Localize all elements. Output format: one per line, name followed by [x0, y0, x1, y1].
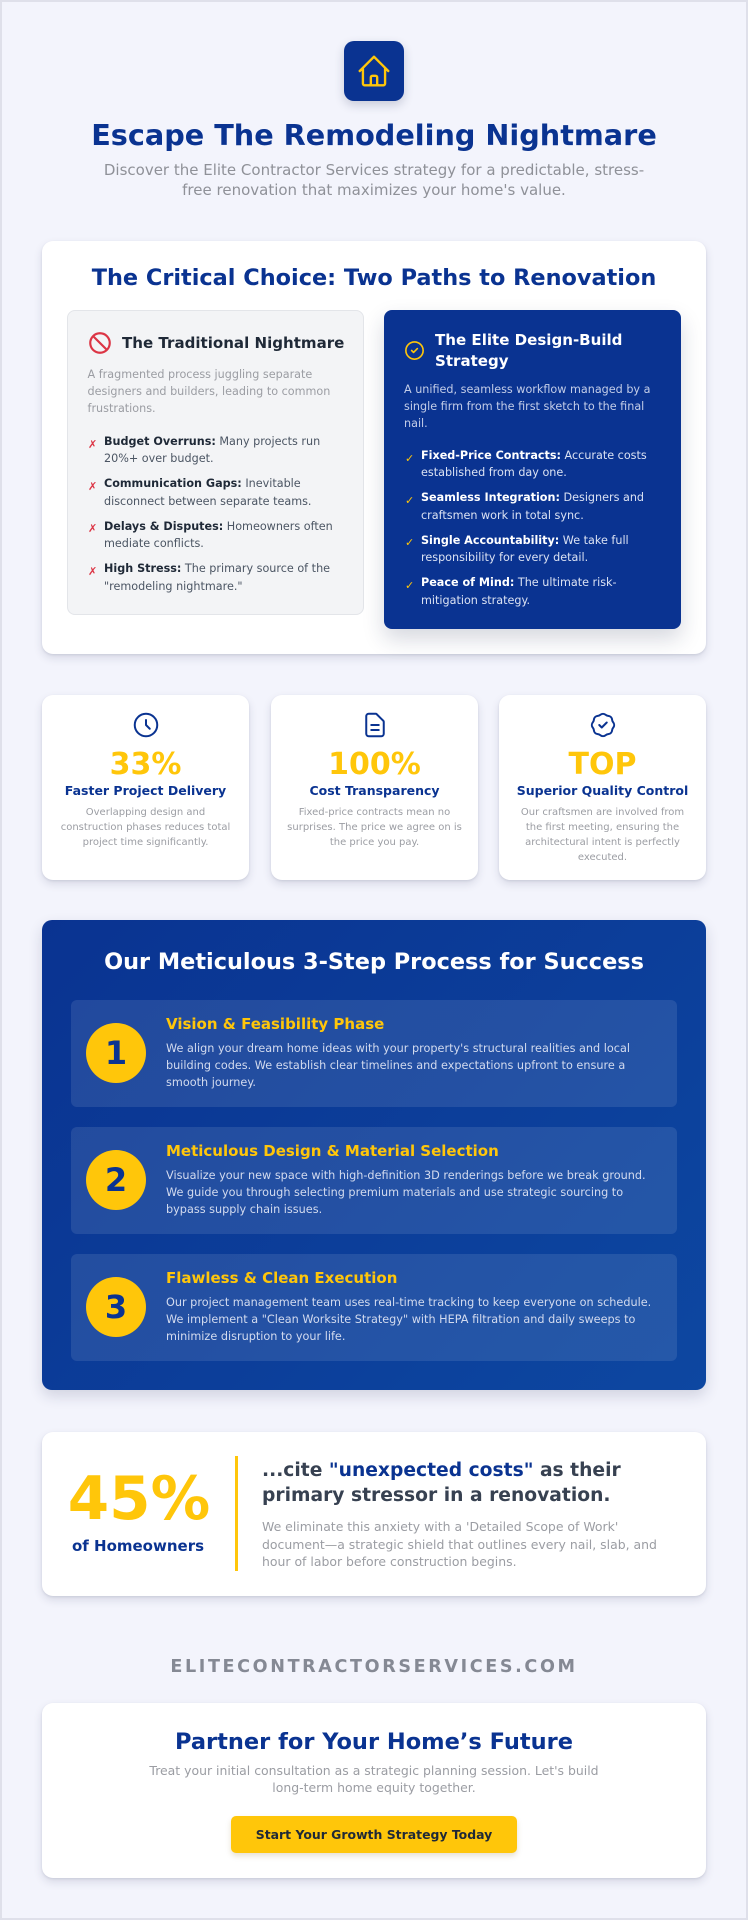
- cta description: long-term home equity together.: [272, 1780, 476, 1795]
- panel: stat cost transparency: [271, 695, 478, 880]
- step description: Our project management team uses real-time tracking to keep everyone on schedule.: [166, 1296, 651, 1308]
- text: traditional description: designers and builders, leading to common: [88, 385, 330, 398]
- callout description: hour of labor before construction begins.: [262, 1554, 517, 1569]
- list: elite benefits: craftsmen work in total sync.: [421, 509, 584, 522]
- step description: smooth journey.: [166, 1076, 256, 1089]
- heading: elite strategy: The Elite Design-Build: [435, 331, 622, 349]
- stat description: the first meeting, ensuring the: [526, 822, 679, 832]
- panel: critical choice: [42, 241, 706, 654]
- icon: house logo: [344, 41, 404, 101]
- list: traditional problems: mediate conflicts.: [104, 537, 204, 550]
- stat description: [521, 806, 684, 862]
- list: elite benefits: ✓: [405, 452, 414, 465]
- cta heading: Partner for Your Home’s Future: [175, 1729, 573, 1755]
- heading: elite strategy: Strategy: [435, 352, 509, 370]
- text: elite description: nail.: [404, 417, 428, 430]
- step title: Vision & Feasibility Phase: [166, 1015, 384, 1033]
- list: traditional problems: 20%+ over budget.: [104, 452, 214, 465]
- list: elite benefits: Peace of Mind: The ultimate risk-: [421, 576, 617, 589]
- text: elite description: [404, 382, 650, 430]
- list: elite benefits: ✓: [405, 579, 414, 592]
- stat description: surprises. The price we agree on is: [287, 822, 462, 832]
- callout description: [262, 1519, 657, 1569]
- step description: Visualize your new space with high-definition 3D renderings before we break ground.: [166, 1168, 646, 1182]
- step description: building codes. We establish clear timelines and expectations upfront to ensure a: [166, 1059, 625, 1072]
- number badge 1: [86, 1023, 146, 1083]
- step description: We implement a "Clean Worksite Strategy" with HEPA filtration and daily sweeps to: [166, 1313, 635, 1326]
- list: traditional problems: Delays & Disputes: Homeowners often: [104, 520, 333, 533]
- number badge 3: [86, 1277, 146, 1337]
- cta button: [231, 1816, 517, 1853]
- list: elite benefits: ✓: [405, 494, 414, 507]
- text: elite description: single firm from the first sketch to the final: [404, 400, 644, 413]
- number badge 2: [86, 1150, 146, 1210]
- heading: traditional nightmare: The Traditional Nightmare: [122, 334, 344, 352]
- panel: traditional nightmare: [67, 310, 364, 615]
- step description: bypass supply chain issues.: [166, 1203, 322, 1216]
- title: Escape The Remodeling Nightmare: [91, 118, 657, 152]
- list: elite benefits: mitigation strategy.: [421, 594, 530, 607]
- stat description: construction phases reduces total: [61, 822, 230, 832]
- callout heading: [262, 1460, 621, 1506]
- list: traditional problems: "remodeling nightmare.": [104, 580, 243, 593]
- panel: 3-step process: [42, 920, 706, 1390]
- stat description: project time significantly.: [83, 836, 208, 848]
- stat label: Superior Quality Control: [517, 783, 688, 798]
- icon: ban: [89, 332, 111, 354]
- text: elite description: A unified, seamless workflow managed by a: [404, 382, 650, 396]
- icon: badge check: [590, 712, 616, 738]
- list: traditional problems: ✗: [88, 565, 97, 578]
- cta description: Treat your initial consultation as a strategic planning session. Let's build: [149, 1762, 599, 1778]
- text: traditional description: [88, 368, 330, 415]
- list: traditional problems: High Stress: The primary source of the: [104, 562, 330, 575]
- website url: ELITECONTRACTORSERVICES.COM: [170, 1657, 578, 1677]
- list: traditional problems: Budget Overruns: Many projects run: [104, 435, 320, 448]
- step description: We guide you through selecting premium materials and use strategic sourcing to: [166, 1186, 623, 1199]
- stat description: architectural intent is perfectly: [525, 836, 680, 848]
- stat description: Our craftsmen are involved from: [521, 806, 684, 818]
- stat description: executed.: [578, 852, 627, 862]
- subtitle: Discover the Elite Contractor Services strategy for a predictable, stress-: [104, 161, 644, 179]
- panel: call to action: [42, 1703, 706, 1878]
- step description: We align your dream home ideas with your property's structural realities and local: [166, 1042, 630, 1054]
- icon: clock: [134, 712, 158, 738]
- step title: Flawless & Clean Execution: [166, 1269, 397, 1287]
- step 1: [71, 1000, 677, 1107]
- stat number: TOP: TOP: [569, 747, 636, 782]
- heading: process: Our Meticulous 3-Step Process for Success: [104, 949, 644, 975]
- heading: elite strategy: [435, 331, 622, 370]
- list: traditional problems: ✗: [88, 480, 97, 493]
- panel: 45% statistic: [42, 1432, 706, 1596]
- list: elite benefits: responsibility for every detail.: [421, 551, 588, 564]
- step description: [166, 1168, 646, 1216]
- callout heading: ...cite "unexpected costs" as their: [262, 1460, 621, 1481]
- list: traditional problems: ✗: [88, 438, 97, 451]
- icon: check circle: [405, 341, 424, 360]
- subtitle: free renovation that maximizes your home's value.: [182, 181, 566, 199]
- list: traditional problems: Communication Gaps: Inevitable: [104, 477, 301, 490]
- stat label: Faster Project Delivery: [65, 783, 226, 798]
- list: traditional problems: disconnect between separate teams.: [104, 495, 311, 508]
- list: elite benefits: ✓: [405, 536, 414, 549]
- heading: critical choice: The Critical Choice: Two Paths to Renovation: [92, 265, 656, 291]
- stat number: 100%: 100%: [328, 747, 421, 782]
- panel: stat quality control: [499, 695, 706, 880]
- stat label: of Homeowners: [72, 1537, 204, 1555]
- stat description: Overlapping design and: [86, 806, 205, 818]
- list: elite benefits: Fixed-Price Contracts: Accurate costs: [421, 449, 647, 462]
- list: elite benefits: Seamless Integration: Designers and: [421, 491, 644, 504]
- stat description: [61, 806, 230, 848]
- stat description: Fixed-price contracts mean no: [299, 806, 450, 818]
- stat number: 33%: 33%: [110, 747, 181, 782]
- stat description: [287, 806, 462, 848]
- list: traditional problems: ✗: [88, 522, 97, 535]
- list: traditional problems: [88, 435, 333, 593]
- callout description: document—a strategic shield that outlines every nail, slab, and: [262, 1536, 657, 1552]
- stat label: Cost Transparency: [309, 783, 440, 798]
- icon: document: [365, 712, 385, 738]
- step description: minimize disruption to your life.: [166, 1330, 345, 1343]
- stat number: 45%: 45%: [68, 1465, 210, 1534]
- list: elite benefits: [405, 449, 647, 607]
- callout heading: primary stressor in a renovation.: [262, 1485, 610, 1506]
- step description: [166, 1296, 651, 1343]
- number badge 1: 1: [105, 1034, 127, 1072]
- panel: stat faster delivery: [42, 695, 249, 880]
- cta button: Start Your Growth Strategy Today: [256, 1827, 492, 1842]
- divider: [235, 1456, 238, 1571]
- number badge 3: 3: [105, 1288, 127, 1326]
- callout description: We eliminate this anxiety with a 'Detailed Scope of Work': [262, 1519, 618, 1534]
- step description: [166, 1042, 630, 1089]
- step title: Meticulous Design & Material Selection: [166, 1142, 499, 1160]
- number badge 2: 2: [105, 1161, 127, 1199]
- text: traditional description: frustrations.: [88, 402, 156, 415]
- list: elite benefits: established from day one.: [421, 466, 567, 479]
- stat description: the price you pay.: [330, 836, 419, 848]
- panel: elite design-build: [384, 310, 681, 629]
- step 2: [71, 1127, 677, 1234]
- subtitle: [104, 161, 644, 199]
- list: elite benefits: Single Accountability: We take full: [421, 534, 629, 547]
- cta description: [149, 1762, 599, 1795]
- text: traditional description: A fragmented process juggling separate: [88, 368, 312, 380]
- step 3: [71, 1254, 677, 1361]
